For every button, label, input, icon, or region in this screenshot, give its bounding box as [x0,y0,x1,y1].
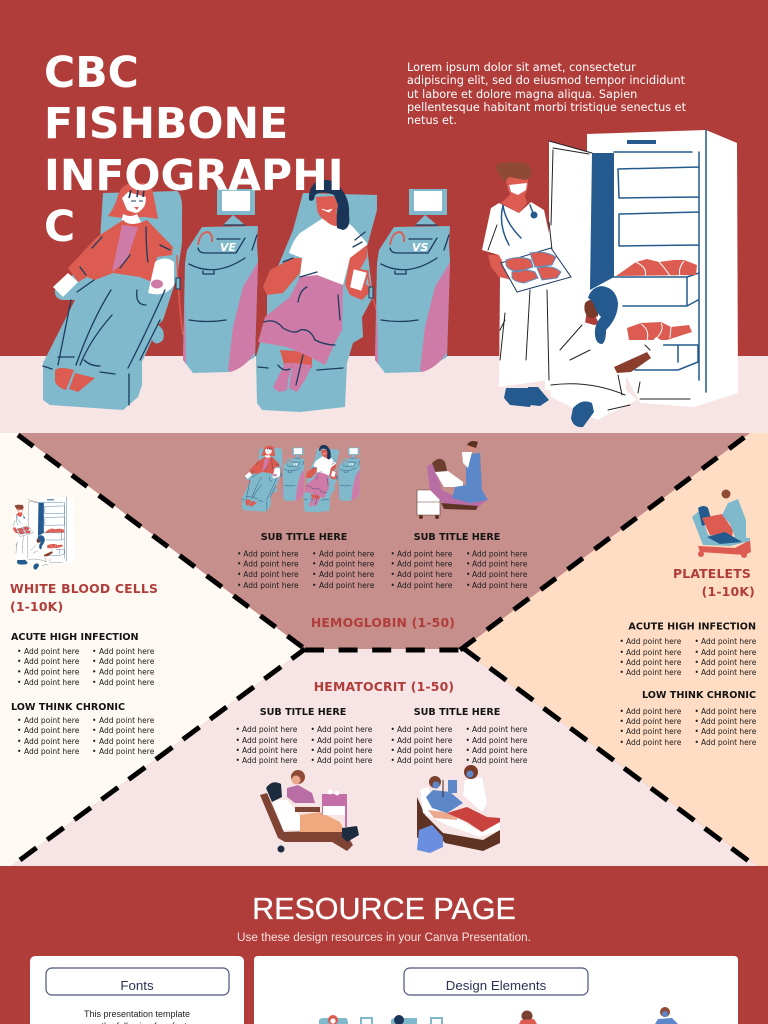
points column 3: Add point here [397,756,453,765]
chronic points column 1: Add point here [626,727,682,736]
points column 1: • [236,756,240,765]
acute points column 2: Add point here [99,678,155,687]
chronic points column 1: Add point here [24,737,80,746]
points column 2: • [310,736,315,745]
points column 1: • [236,736,240,745]
points column 4: Add point here [472,746,528,755]
acute points column 2: • [694,668,699,677]
title: CBC [44,49,139,98]
subheading: chronic: LOW THINK CHRONIC [642,690,756,701]
chronic points column 2: • [694,727,699,736]
acute points column 1: Add point here [626,648,682,657]
acute points column 2: • [92,668,96,676]
acute points column 1: Add point here [24,647,80,656]
panel: design elements card [254,956,738,1024]
chronic points column 1: • [620,738,624,747]
chronic points column 2: Add point here [99,737,155,746]
resource subtitle: Use these design resources in your Canva Presentation. [237,931,531,944]
points column 2: Add point here [317,725,373,734]
points column 1: • [237,560,241,568]
panel: fonts card [30,956,244,1024]
acute points column 2: • [92,678,96,687]
points column 3: Add point here [397,581,453,590]
fonts description: This presentation template [84,1009,190,1019]
panel: white blood cells background [0,433,305,866]
chronic points column 1: • [17,737,21,746]
chronic points column 2: • [92,747,96,756]
chronic points column 1: Add point here [626,717,682,726]
points column 4: Add point here [472,550,528,558]
chronic points column 2: Add point here [99,747,155,756]
icon: patient on bed with doctor [417,765,500,853]
chronic points column 2: Add point here [701,738,757,747]
acute points column 2: • [694,648,699,657]
points column 1: Add point here [242,756,298,765]
chronic points column 2: • [92,726,96,735]
element preview: donors [319,1015,443,1024]
acute points column 1: • [17,678,21,687]
points column 2: Add point here [319,581,375,590]
points column 2: Add point here [317,736,373,745]
points column 3: Add point here [397,560,453,568]
points column 1: • [237,581,241,590]
heading: hemoglobin: HEMOGLOBIN (1-50) [311,615,455,630]
chronic points column 2: • [92,716,96,725]
points column 1: • [236,725,240,734]
resource title: RESOURCE PAGE [252,892,516,926]
panel: hematocrit content [236,679,528,853]
icon: donors small [242,445,360,512]
points column 2: • [310,756,315,765]
acute points column 2: Add point here [701,668,757,677]
points column 1: Add point here [242,725,298,734]
points column 2: Add point here [317,756,373,765]
chronic points column 1: • [620,727,624,736]
icon: patient reclining with carer [260,770,359,852]
chronic points column 1: Add point here [626,738,682,747]
acute points column 2: Add point here [701,637,757,646]
acute points column 2: • [92,657,96,666]
points column 1: Add point here [242,736,298,745]
points column 4: • [466,581,470,590]
points column 4: Add point here [472,560,528,568]
acute points column 1: • [620,637,624,646]
chronic points column 2: Add point here [701,707,757,716]
intro paragraph: netus et. [407,114,457,127]
points column 3: Add point here [397,736,453,745]
points column 4: Add point here [472,570,528,579]
heading: platelets: PLATELETS [673,566,751,581]
points column 3: Add point here [397,725,453,734]
acute points column 2: Add point here [701,658,757,667]
illustration: nurse, worker and blood fridge [482,130,738,427]
illustration: donors on chairs with machines [43,180,450,412]
intro paragraph: ut labore et dolore magna aliqua. Sapien [407,88,637,101]
points column 3: • [390,746,395,755]
acute points column 2: Add point here [99,657,155,666]
points column 4: Add point here [472,581,528,590]
intro paragraph: pellentesque habitant morbi tristique senectus et [407,101,687,114]
chronic points column 2: Add point here [701,727,757,736]
panel: platelets content [620,490,757,747]
points column 3: Add point here [397,550,453,558]
floor band [0,356,768,433]
points column 1: • [236,746,240,755]
subheading: chronic: LOW THINK CHRONIC [11,702,125,713]
acute points column 1: Add point here [24,678,80,687]
acute points column 1: • [620,668,624,677]
button: design elements [404,968,588,995]
points column 4: • [466,736,470,745]
acute points column 1: • [17,647,21,656]
points column 3: • [390,725,395,734]
points column 1: Add point here [242,746,298,755]
heading: white blood cells: (1-10K) [10,599,63,614]
points column 2: • [310,746,315,755]
points column 4: Add point here [472,736,528,745]
button: fonts: Fonts [120,978,154,993]
chronic points column 1: • [620,707,624,716]
points column 3: • [390,560,395,568]
points column 2: • [310,725,315,734]
heading: white blood cells: WHITE BLOOD CELLS [10,581,158,596]
points column 1: Add point here [243,550,299,558]
chronic points column 2: Add point here [99,716,155,725]
panel: platelets background [462,433,768,866]
acute points column 1: • [620,648,624,657]
acute points column 2: Add point here [99,647,155,656]
points column 3: Add point here [397,746,453,755]
chronic points column 2: • [694,738,699,747]
title: INFOGRAPHI [44,152,344,201]
acute points column 2: Add point here [99,668,155,676]
points column 2: Add point here [319,570,375,579]
acute points column 2: • [694,637,699,646]
acute points column 1: Add point here [24,657,80,666]
points column 2: Add point here [319,560,375,568]
points column 1: Add point here [243,560,299,568]
acute points column 1: Add point here [626,637,682,646]
chronic points column 2: • [694,707,699,716]
heading: hematocrit: HEMATOCRIT (1-50) [314,679,454,694]
points column 2: • [312,560,316,568]
points column 4: • [466,746,470,755]
chronic points column 2: Add point here [99,726,155,735]
acute points column 1: • [17,657,21,666]
chronic points column 2: Add point here [701,717,757,726]
points column 3: • [390,736,395,745]
points column 4: Add point here [472,725,528,734]
acute points column 1: Add point here [24,668,80,676]
panel: white blood cells content [10,497,158,756]
points column 4: • [466,560,470,568]
fishbone dashed lines [18,433,750,862]
subheading: acute: ACUTE HIGH INFECTION [628,622,756,632]
subtitle right: SUB TITLE HERE [414,532,500,543]
chronic points column 1: Add point here [24,726,80,735]
header background [0,0,768,356]
acute points column 2: • [92,647,96,656]
element preview: figure one [519,1010,537,1024]
chronic points column 1: Add point here [24,716,80,725]
element preview: figure two [655,1007,678,1024]
acute points column 1: • [17,668,21,676]
points column 3: • [390,570,395,579]
subtitle left: SUB TITLE HERE [260,707,346,718]
points column 1: • [237,550,241,558]
points column 3: Add point here [397,570,453,579]
panel: hemoglobin content [237,441,528,630]
icon: fridge small [11,497,74,570]
chronic points column 1: • [17,747,21,756]
acute points column 1: Add point here [626,658,682,667]
chronic points column 1: Add point here [626,707,682,716]
points column 1: Add point here [243,570,299,579]
icon: patient in bed with nurse [417,441,488,519]
resource section background [0,866,768,1024]
title: C [44,203,75,252]
points column 1: Add point here [243,581,299,590]
subtitle right: SUB TITLE HERE [414,707,500,718]
chronic points column 2: • [92,737,96,746]
button: design elements: Design Elements [446,978,547,993]
points column 1: • [237,570,241,579]
title: FISHBONE [44,100,288,149]
points column 2: • [312,581,316,590]
acute points column 1: • [620,658,624,667]
chronic points column 1: Add point here [24,747,80,756]
chronic points column 1: • [17,726,21,735]
points column 2: Add point here [319,550,375,558]
chronic points column 2: • [694,717,699,726]
acute points column 1: Add point here [626,668,682,677]
points column 2: • [312,550,316,558]
button: fonts [46,968,229,995]
points column 3: • [390,581,395,590]
icon: patient on recliner with nurse [692,490,751,558]
acute points column 2: • [694,658,699,667]
heading: platelets: (1-10K) [702,584,755,599]
acute points column 2: Add point here [701,648,757,657]
intro paragraph: Lorem ipsum dolor sit amet, consectetur [407,61,636,74]
points column 3: • [390,756,395,765]
points column 3: • [390,550,395,558]
points column 2: Add point here [317,746,373,755]
points column 4: • [466,756,470,765]
subtitle left: SUB TITLE HERE [261,532,347,543]
points column 4: • [466,570,470,579]
subheading: acute: ACUTE HIGH INFECTION [11,632,139,643]
chronic points column 1: • [17,716,21,725]
chronic points column 1: • [620,717,624,726]
points column 4: • [466,550,470,558]
intro paragraph: adipiscing elit, sed do eiusmod tempor incididunt [407,74,686,87]
points column 2: • [312,570,316,579]
panel: hematocrit background [12,649,758,866]
points column 4: Add point here [472,756,528,765]
points column 4: • [466,725,470,734]
panel: hemoglobin background [18,433,750,649]
